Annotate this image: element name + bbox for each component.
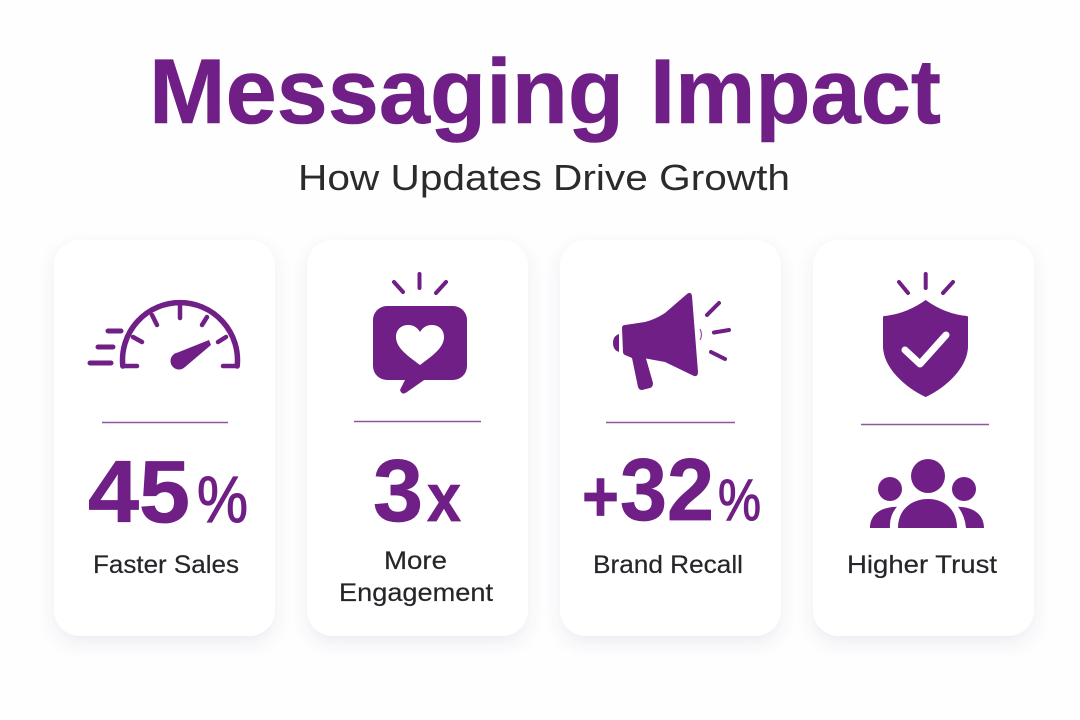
title (149, 41, 941, 143)
icon: group of people (870, 459, 984, 528)
stat: +32%: 32 (620, 440, 714, 539)
stat: +32%: % (718, 468, 761, 533)
label: more engagement: More (384, 547, 447, 575)
stat: 45%: % (197, 462, 248, 536)
subtitle: How Updates Drive Growth (298, 157, 790, 198)
stat: 3x (373, 441, 461, 540)
panel: faster sales (54, 240, 275, 636)
icon: speedometer (90, 303, 238, 370)
panel: brand recall (560, 240, 781, 636)
label: brand recall: Brand Recall (593, 551, 743, 579)
stat: 45% (88, 442, 248, 541)
title: Impact (650, 41, 941, 143)
label: faster sales: Faster Sales (93, 551, 239, 579)
title: Messaging (149, 41, 624, 143)
stat: 45%: 45 (88, 442, 190, 541)
icon: heart speech bubble (373, 274, 467, 394)
label: higher trust: Higher Trust (847, 551, 997, 579)
label: more engagement (339, 547, 493, 607)
stat: 3x: 3 (373, 441, 423, 540)
stat: 3x: x (427, 460, 461, 536)
panel: more engagement (307, 240, 528, 636)
stat: +32%: + (582, 457, 619, 537)
stat: +32% (582, 440, 761, 539)
panel: higher trust (813, 240, 1034, 636)
icon: megaphone (613, 293, 729, 390)
label: more engagement: Engagement (339, 579, 493, 607)
icon: shield with check (883, 274, 968, 397)
